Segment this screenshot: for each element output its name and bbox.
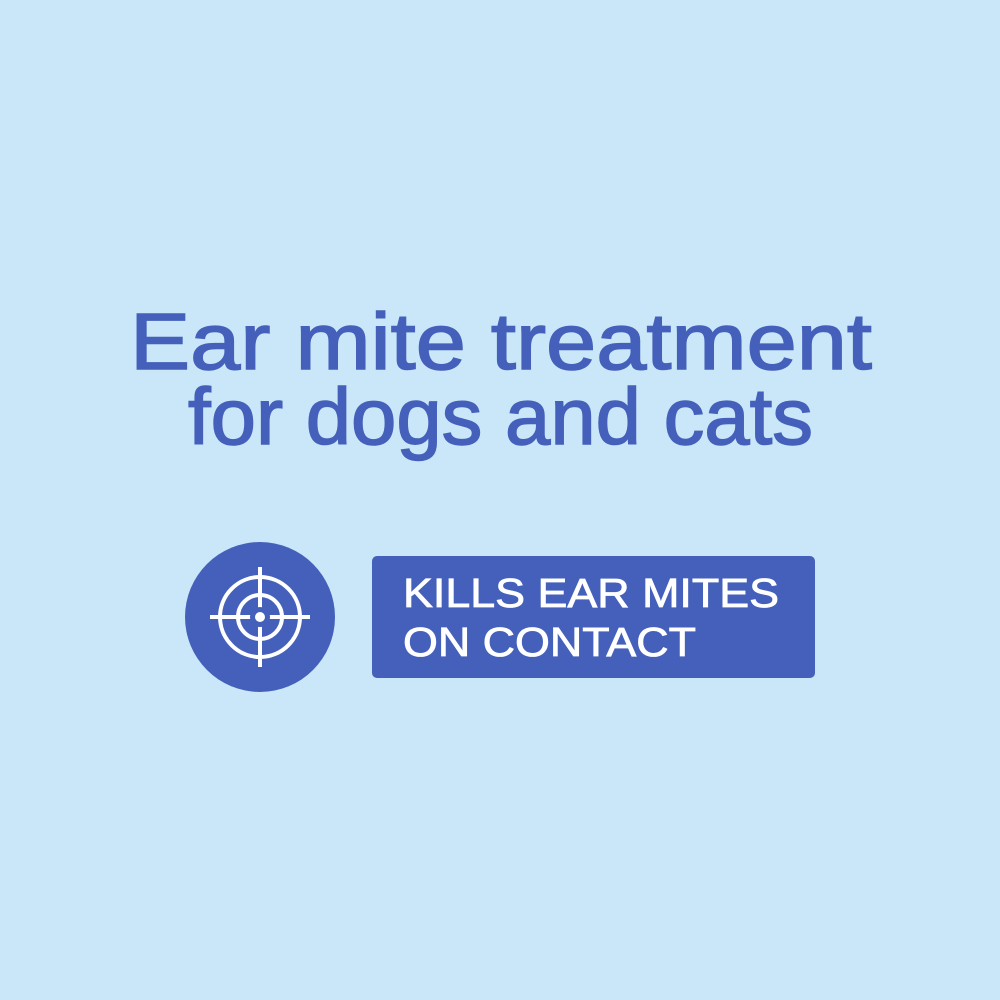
badge: kills ear mites: [372, 556, 815, 678]
title: [130, 297, 872, 461]
title: for dogs and cats: [188, 372, 813, 461]
badge: kills ear mites: ON CONTACT: [403, 619, 696, 665]
title: Ear mite treatment: [130, 297, 872, 386]
icon: target: [185, 542, 335, 692]
badge: kills ear mites: KILLS EAR MITES: [403, 570, 779, 616]
